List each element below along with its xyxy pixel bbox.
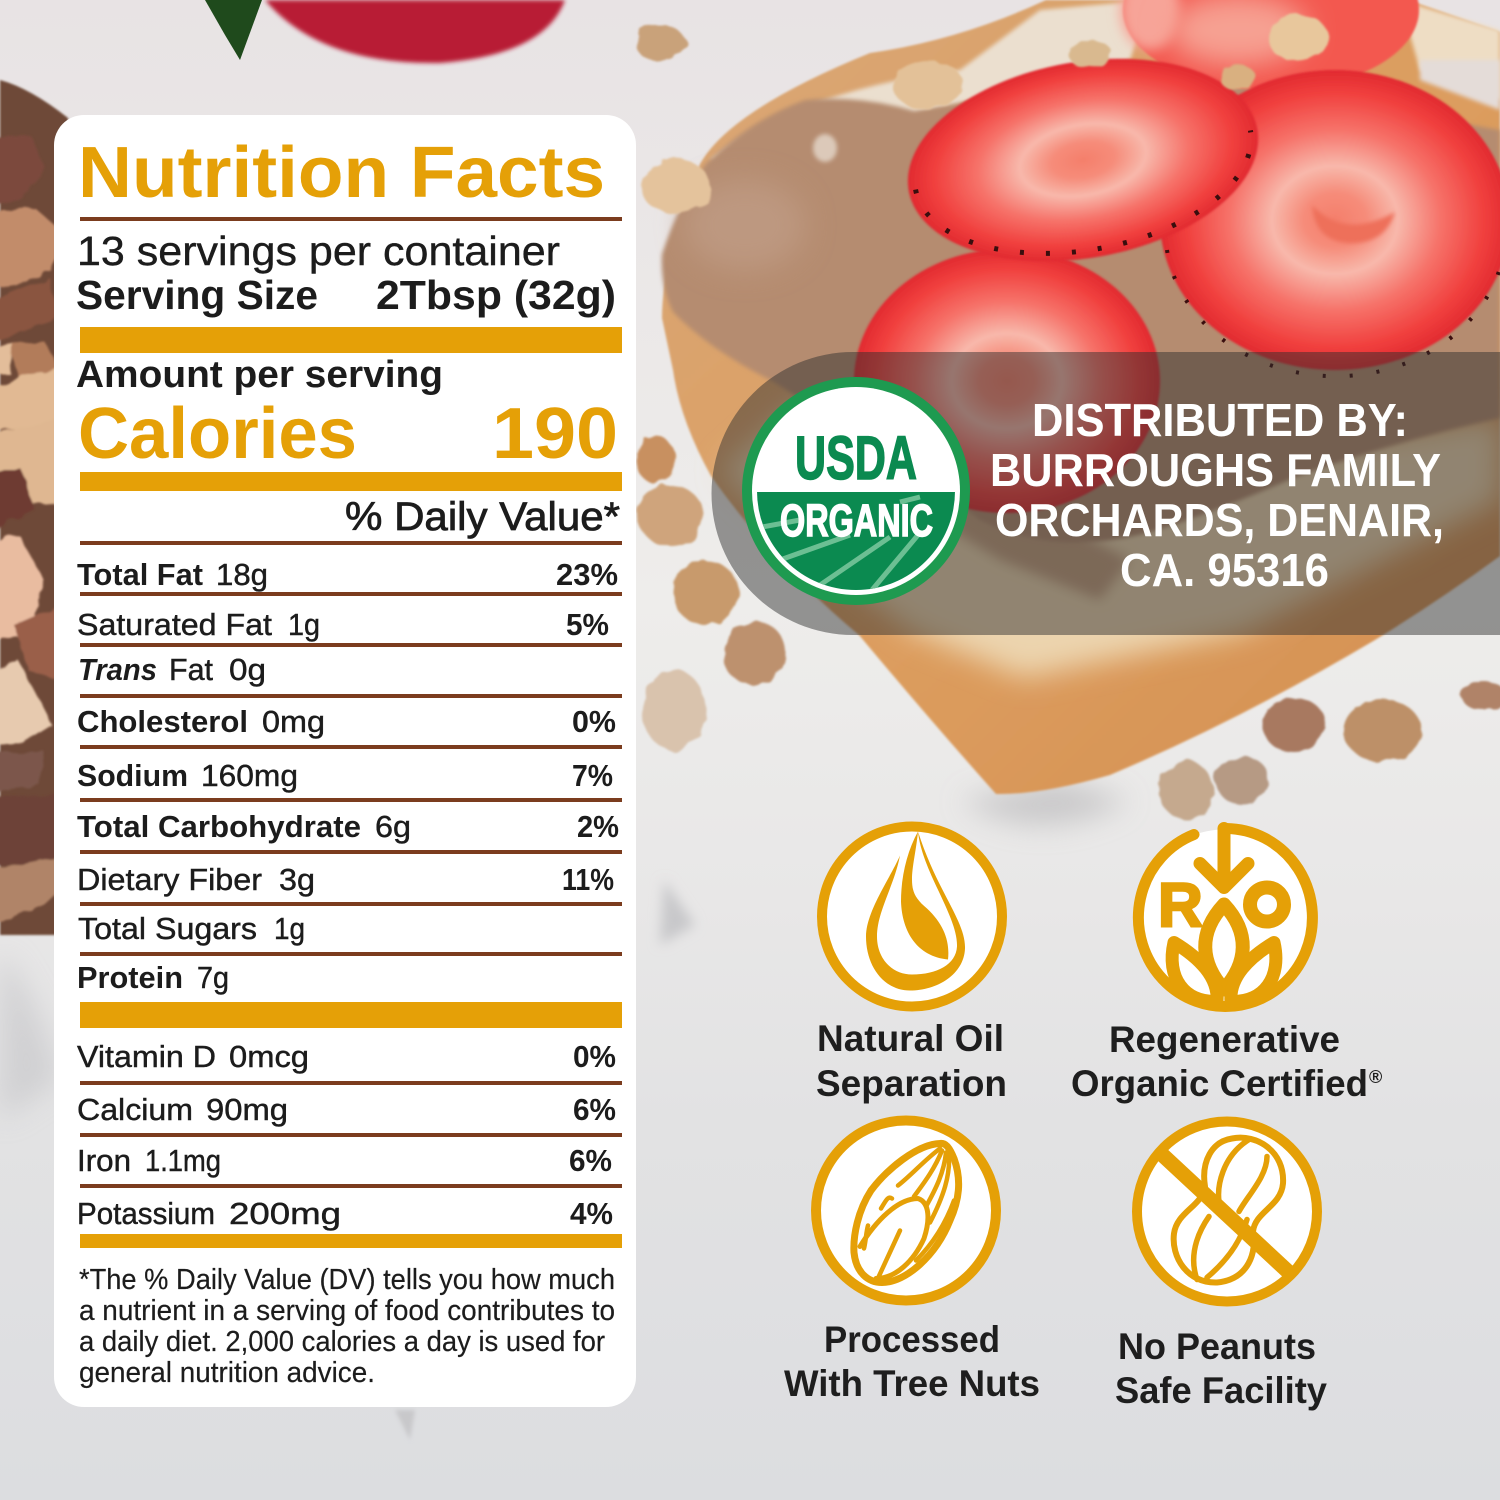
nutrient rows: 7%	[572, 758, 613, 793]
nutrient rows: 7g	[197, 960, 229, 995]
nutrient rows: 0mcg	[229, 1039, 309, 1074]
icon: regenerative organic: R	[1158, 872, 1203, 940]
label: natural oil separation	[816, 1018, 1007, 1104]
nutrient rows: 5%	[566, 607, 609, 642]
label: regenerative organic certified	[1071, 1019, 1382, 1104]
calories: 190	[492, 394, 618, 474]
labels: feature captions	[784, 1018, 1382, 1411]
photo: scattered nuts	[635, 14, 1500, 819]
photo: strawberry slices	[854, 0, 1500, 513]
nutrient rows: 200mg	[229, 1196, 341, 1231]
label: regenerative organic certified: ®	[1369, 1067, 1382, 1087]
nutrient rows: 0g	[229, 652, 266, 687]
nutrient rows: 6g	[375, 809, 411, 844]
panel: distributor band	[712, 352, 1500, 635]
icon: regenerative organic	[1136, 828, 1312, 1006]
icon: USDA organic seal	[742, 377, 970, 605]
text: distributor address: ORCHARDS, DENAIR,	[995, 494, 1444, 546]
nutrient rows: 6%	[569, 1143, 612, 1178]
nutrient rows: Calcium	[77, 1092, 193, 1127]
nutrient rows: 3g	[279, 862, 315, 897]
label: no peanuts safe facility: Safe Facility	[1115, 1370, 1327, 1411]
label: processed with tree nuts: With Tree Nuts	[784, 1363, 1040, 1404]
panel: nutrition facts label	[54, 115, 636, 1407]
nutrient rows: Dietary Fiber	[77, 862, 262, 897]
calories: Calories	[78, 394, 357, 474]
label: regenerative organic certified: Regenerative	[1109, 1019, 1340, 1060]
serving information: 13 servings per container	[77, 228, 560, 274]
photo: almond butter spread	[662, 70, 1500, 543]
text: distributor address: DISTRIBUTED BY:	[1032, 394, 1408, 446]
nutrient rows: Saturated Fat	[77, 607, 272, 642]
footnote: *The % Daily Value (DV) tells you how much	[79, 1264, 615, 1296]
nutrient rows: Trans	[78, 652, 157, 687]
nutrient rows: 0%	[572, 704, 616, 739]
nutrient rows: Sodium	[77, 758, 188, 793]
label: no peanuts safe facility	[1115, 1326, 1327, 1411]
label: processed with tree nuts	[784, 1319, 1040, 1404]
label: processed with tree nuts: Processed	[824, 1319, 1000, 1360]
label: regenerative organic certified: Organic Certified	[1071, 1063, 1368, 1104]
nutrient rows: Protein	[77, 960, 183, 995]
photo: toast slice	[662, 0, 1500, 794]
label: no peanuts safe facility: No Peanuts	[1118, 1326, 1316, 1367]
label: natural oil separation: Natural Oil	[817, 1018, 1004, 1059]
nutrient rows: Vitamin D	[77, 1039, 216, 1074]
text: distributor address: CA. 95316	[1120, 544, 1329, 596]
nutrient rows: Cholesterol	[77, 704, 248, 739]
serving information	[76, 228, 616, 396]
nutrient rows: 0mg	[262, 704, 325, 739]
calories	[78, 394, 618, 474]
nutrient rows: 160mg	[201, 758, 298, 793]
nutrient rows	[77, 557, 619, 1231]
text: distributor address: BURROUGHS FAMILY	[990, 444, 1441, 496]
nutrient rows: 1.1mg	[145, 1143, 221, 1178]
nutrient rows: Total Fat	[77, 557, 203, 592]
nutrient rows: 18g	[216, 557, 268, 592]
nutrient rows: 0%	[573, 1039, 616, 1074]
text: distributor address	[990, 394, 1444, 596]
photo: nut-filled wooden bowl at left edge	[0, 80, 68, 935]
footnote: a daily diet. 2,000 calories a day is used for	[79, 1326, 605, 1358]
nutrient rows: Fat	[169, 652, 213, 687]
footnote	[79, 1264, 615, 1389]
icon: USDA organic seal: ORGANIC	[780, 495, 933, 546]
divider lines	[80, 217, 622, 1188]
nutrient rows: 2%	[577, 809, 619, 844]
nutrient rows: Total Carbohydrate	[77, 809, 361, 844]
nutrient rows: 1g	[274, 911, 305, 946]
footnote: a nutrient in a serving of food contributes to	[79, 1295, 615, 1327]
serving information: Amount per serving	[76, 354, 443, 396]
gold bars	[80, 327, 622, 1248]
icon: oil drop	[822, 826, 1002, 1006]
nutrient rows: 90mg	[206, 1092, 288, 1127]
nutrient rows: Potassium	[77, 1196, 215, 1231]
nutrient rows: Total Sugars	[78, 911, 257, 946]
serving information: 2Tbsp (32g)	[376, 272, 616, 318]
nutrient rows: 4%	[570, 1196, 613, 1231]
footnote: general nutrition advice.	[79, 1357, 375, 1389]
daily value heading: % Daily Value*	[345, 495, 620, 539]
nutrient rows: 1g	[288, 607, 320, 642]
nutrient rows: 23%	[556, 557, 618, 592]
title: Nutrition Facts	[78, 133, 605, 213]
nutrient rows: 11%	[562, 862, 614, 897]
icon: USDA organic seal: USDA	[795, 424, 917, 492]
icon: no peanuts	[1137, 1122, 1317, 1302]
photo: strawberry at top	[205, 0, 565, 63]
label: natural oil separation: Separation	[816, 1063, 1007, 1104]
serving information: Serving Size	[76, 272, 318, 318]
icon: almond	[816, 1120, 996, 1300]
nutrient rows: Iron	[77, 1143, 131, 1178]
nutrient rows: 6%	[573, 1092, 616, 1127]
